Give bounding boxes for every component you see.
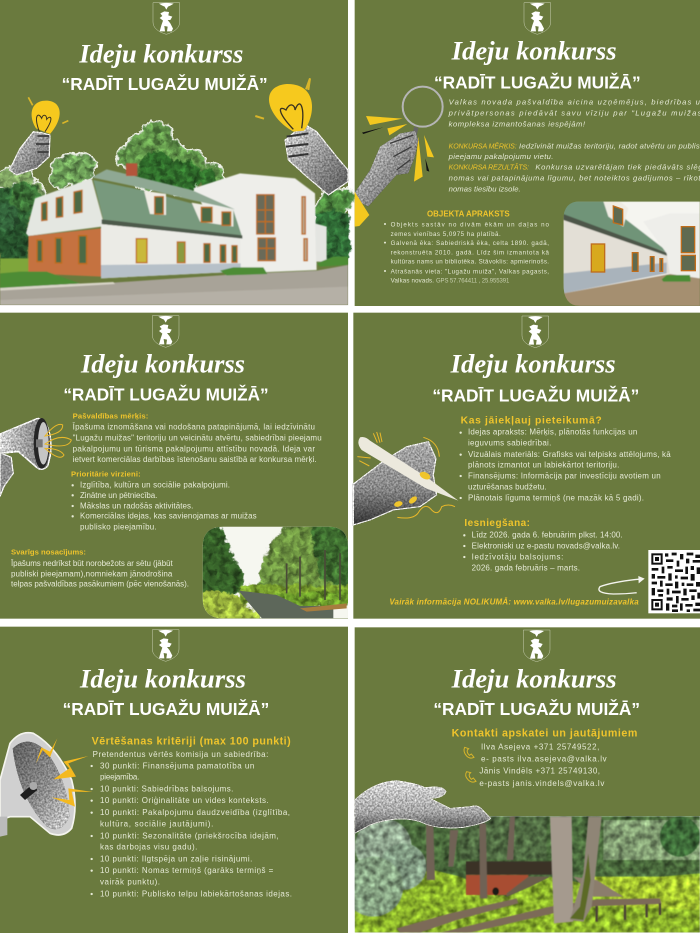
script title: Ideju konkurss xyxy=(80,348,245,378)
object description list: Valkas novads. xyxy=(391,278,434,285)
panel: municipality goals xyxy=(0,313,350,622)
application contents: Finansējums: Informācija par investīciju avotiem un xyxy=(468,471,661,480)
application contents: uzturēšanas budžetu. xyxy=(468,482,547,491)
object description list: rekonstruēta 2010. gadā. Līdz šim izmantota kā xyxy=(391,249,550,256)
application contents: ieguvums sabiedrībai. xyxy=(468,439,551,448)
crest xyxy=(153,3,180,34)
evaluation criteria list: kas darbojas visu gadu). xyxy=(100,843,197,852)
phone icons xyxy=(464,747,476,782)
priority directions: Mākslas un radošās aktivitātes. xyxy=(80,501,193,510)
municipality goal text: "Lugažu muižas" teritoriju un veicinātu atvērtu, sabiedrībai pieejamu xyxy=(73,434,322,443)
mansard roof xyxy=(93,180,242,237)
arrow head xyxy=(638,576,645,583)
brick ground floor xyxy=(28,228,101,277)
QR code xyxy=(648,550,700,613)
regulations link: Vairāk informācija NOLIKUMĀ: www.valka.lv/lugazumuizavalka xyxy=(389,598,639,607)
evaluation criteria list: Vērtēšanas kritēriji (max 100 punkti) xyxy=(92,735,291,747)
application contents: Vizuālais materiāls: Grafisks vai telpisks attēlojums, kā xyxy=(468,450,671,459)
hand cut-out xyxy=(355,781,491,833)
competition goal and result: nomas tiesību izsole. xyxy=(449,184,521,193)
script title: Ideju konkurss xyxy=(79,664,246,694)
evaluation criteria list: vairāk punktu). xyxy=(100,877,160,886)
priority directions: Komerciālas idejas, kas savienojamas ar muižas xyxy=(80,512,257,521)
panel: competition description xyxy=(355,0,700,306)
municipality goal text: pakalpojumu un tūrisma pakalpojumu attīstību novadā. Ideja var xyxy=(73,444,315,453)
evaluation criteria list: 10 punkti: Sabiedrības balsojums. xyxy=(100,784,233,793)
script title: Ideju konkurss xyxy=(451,35,617,65)
photo: park with boardwalk xyxy=(343,816,700,933)
right white block xyxy=(193,173,317,273)
priority directions: Zinātne un pētniecība. xyxy=(80,491,157,500)
subtitle: “RADĪT LUGAŽU MUIŽĀ” xyxy=(63,385,269,405)
object description list: Objekts sastāv no divām ēkām un daļas no xyxy=(391,222,550,229)
application contents: Plānotais līguma termiņš (ne mazāk kā 5 gadi). xyxy=(468,493,644,502)
script title: Ideju konkurss xyxy=(451,664,617,694)
panel: title slide with manor house xyxy=(0,0,354,305)
submission details: Elektroniski uz e-pastu novads@valka.lv. xyxy=(472,541,620,550)
object description list: kultūras nams un bibliotēka. Stāvoklis: apmierinošs. xyxy=(391,259,549,266)
application contents: Idejas apraksts: Mērķis, plānotās funkcijas un xyxy=(468,428,637,437)
important condition: Svarīgs nosacījums: xyxy=(11,548,86,557)
contact details xyxy=(479,743,607,788)
priority directions xyxy=(71,469,257,531)
manor house xyxy=(0,163,348,305)
contacts heading: Kontakti apskatei un jautājumiem xyxy=(452,727,637,739)
priority directions: Izglītība, kultūra un sociālie pakalpojumi. xyxy=(80,481,230,490)
subtitle: “RADĪT LUGAŽU MUIŽĀ” xyxy=(432,385,639,405)
windows xyxy=(37,190,307,264)
crest xyxy=(523,630,550,662)
subtitle: “RADĪT LUGAŽU MUIŽĀ” xyxy=(63,699,269,719)
important condition: publiski pieejamam),nomniekam jānodrošina xyxy=(11,569,173,578)
crest xyxy=(152,316,179,347)
panel: evaluation criteria xyxy=(0,627,348,933)
photo: pond and trees xyxy=(200,525,350,622)
evaluation criteria list: kultūra, sociālie jautājumi). xyxy=(100,819,213,828)
competition goal and result: pieejamu pakalpojumu vietu. xyxy=(448,152,553,161)
contact details: Ilva Asejeva +371 25749522, xyxy=(481,743,599,752)
submission details: 2026. gada februāris – marts. xyxy=(472,563,580,572)
chimney xyxy=(126,163,137,176)
intro text: kompleksa izmantošanas iespējām! xyxy=(449,119,586,128)
submission details: Iesniegšana: xyxy=(464,518,530,529)
contact details: Jānis Vindēls +371 25749130, xyxy=(479,767,600,776)
object description list: Galvenā ēka: Sabiedriskā ēka, celta 1890. gadā, xyxy=(391,240,549,247)
intro text: privātpersonas piedāvāt savu vīziju par "Lugažu muižas" xyxy=(448,108,700,117)
application contents: Kas jāiekļauj pieteikumā? xyxy=(461,415,602,426)
evaluation criteria list xyxy=(90,735,292,898)
hand holding a white pen xyxy=(353,432,458,525)
megaphone with lightning bolts xyxy=(0,733,93,837)
photo: manor house side view xyxy=(563,201,700,306)
arrow to QR code xyxy=(599,579,643,594)
panel: contacts xyxy=(343,627,700,933)
megaphone xyxy=(0,418,71,497)
contact details: e-pasts janis.vindels@valka.lv xyxy=(479,779,604,788)
hand with magnifying glass xyxy=(355,87,443,227)
cut-out trees behind the house xyxy=(0,122,354,270)
evaluation criteria list: 10 punkti: Publisko telpu labiekārtošanas idejas. xyxy=(100,889,292,898)
application contents xyxy=(459,415,671,502)
subtitle: “RADĪT LUGAŽU MUIŽĀ” xyxy=(434,72,641,92)
evaluation criteria list: pieejamība. xyxy=(100,773,139,782)
object description list: GPS 57.764411 , 25.955391 xyxy=(436,279,510,285)
white ground floor xyxy=(101,224,241,278)
object description list: zemes vienības 5,0975 ha platībā. xyxy=(391,231,501,238)
evaluation criteria list: 10 punkti: Oriģinalitāte un vides konteksts. xyxy=(100,796,269,805)
competition goal and result: KONKURSA MĒRĶIS: xyxy=(449,142,517,150)
municipality goal text: Pašvaldības mērķis: xyxy=(73,412,148,421)
hand with large light bulb xyxy=(255,78,348,195)
evaluation criteria list: 10 punkti: Pakalpojumu daudzveidība (izglītība, xyxy=(100,808,290,817)
crest xyxy=(524,3,551,34)
submission details: Līdz 2026. gada 6. februārim plkst. 14:00. xyxy=(472,531,623,540)
crest xyxy=(522,316,549,348)
subtitle: “RADĪT LUGAŽU MUIŽĀ” xyxy=(433,699,640,719)
evaluation criteria list: 30 punkti: Finansējuma pamatotība un xyxy=(100,761,254,770)
upper gable xyxy=(26,178,103,236)
hand with small light bulb xyxy=(9,97,68,175)
competition goal and result xyxy=(448,141,700,193)
object description list xyxy=(384,222,550,285)
panel: what to include in the application xyxy=(353,313,700,619)
evaluation criteria list: Pretendentus vērtēs komisija un sabiedrība: xyxy=(93,750,268,759)
municipality goal text xyxy=(73,412,322,464)
evaluation criteria list: 10 punkti: Sezonalitāte (priekšrocība idejām, xyxy=(100,831,279,840)
important condition: telpas pašvaldības pasākumiem (pēc vienošanās). xyxy=(11,580,189,589)
important condition xyxy=(11,548,189,589)
object description heading: OBJEKTA APRAKSTS xyxy=(427,209,510,219)
submission details: Iedzīvotāju balsojums: xyxy=(472,552,563,561)
competition goal and result: KONKURSA REZULTĀTS: xyxy=(449,164,529,172)
important condition: Īpašums nedrīkst būt norobežots ar sētu (jābūt xyxy=(11,559,173,568)
subtitle: “RADĪT LUGAŽU MUIŽĀ” xyxy=(62,74,268,94)
competition goal and result: nomas vai patapinājuma līgumu, bet noteiktos gadījumos – rīkota xyxy=(449,174,700,183)
intro text: Valkas novada pašvaldība aicina uzņēmējus, biedrības un xyxy=(449,97,700,106)
priority directions: publisko pieejamību. xyxy=(80,522,157,531)
intro text xyxy=(448,97,700,128)
ground and road xyxy=(0,265,348,305)
application contents: plānots izmantot un labiekārtot teritoriju. xyxy=(468,461,619,470)
evaluation criteria list: 10 punkti: Ilgtspēja un zaļie risinājumi. xyxy=(100,854,252,863)
evaluation criteria list: 10 punkti: Nomas termiņš (garāks termiņš = xyxy=(100,866,274,875)
priority directions: Prioritārie virzieni: xyxy=(71,469,141,478)
contact details: e- pasts ilva.asejeva@valka.lv xyxy=(481,755,607,764)
object description list: Atrašanās vieta: "Lugažu muiža", Valkas pagasts, xyxy=(391,268,549,275)
submission details xyxy=(463,518,623,572)
script title: Ideju konkurss xyxy=(78,38,243,68)
crest xyxy=(152,630,179,661)
script title: Ideju konkurss xyxy=(450,348,616,378)
municipality goal text: Īpašuma iznomāšana vai nodošana patapinājumā, lai iedzīvinātu xyxy=(73,422,315,431)
municipality goal text: ietvert komerciālas darbības īstenošanu saistībā ar konkursa mērķi. xyxy=(73,455,317,464)
